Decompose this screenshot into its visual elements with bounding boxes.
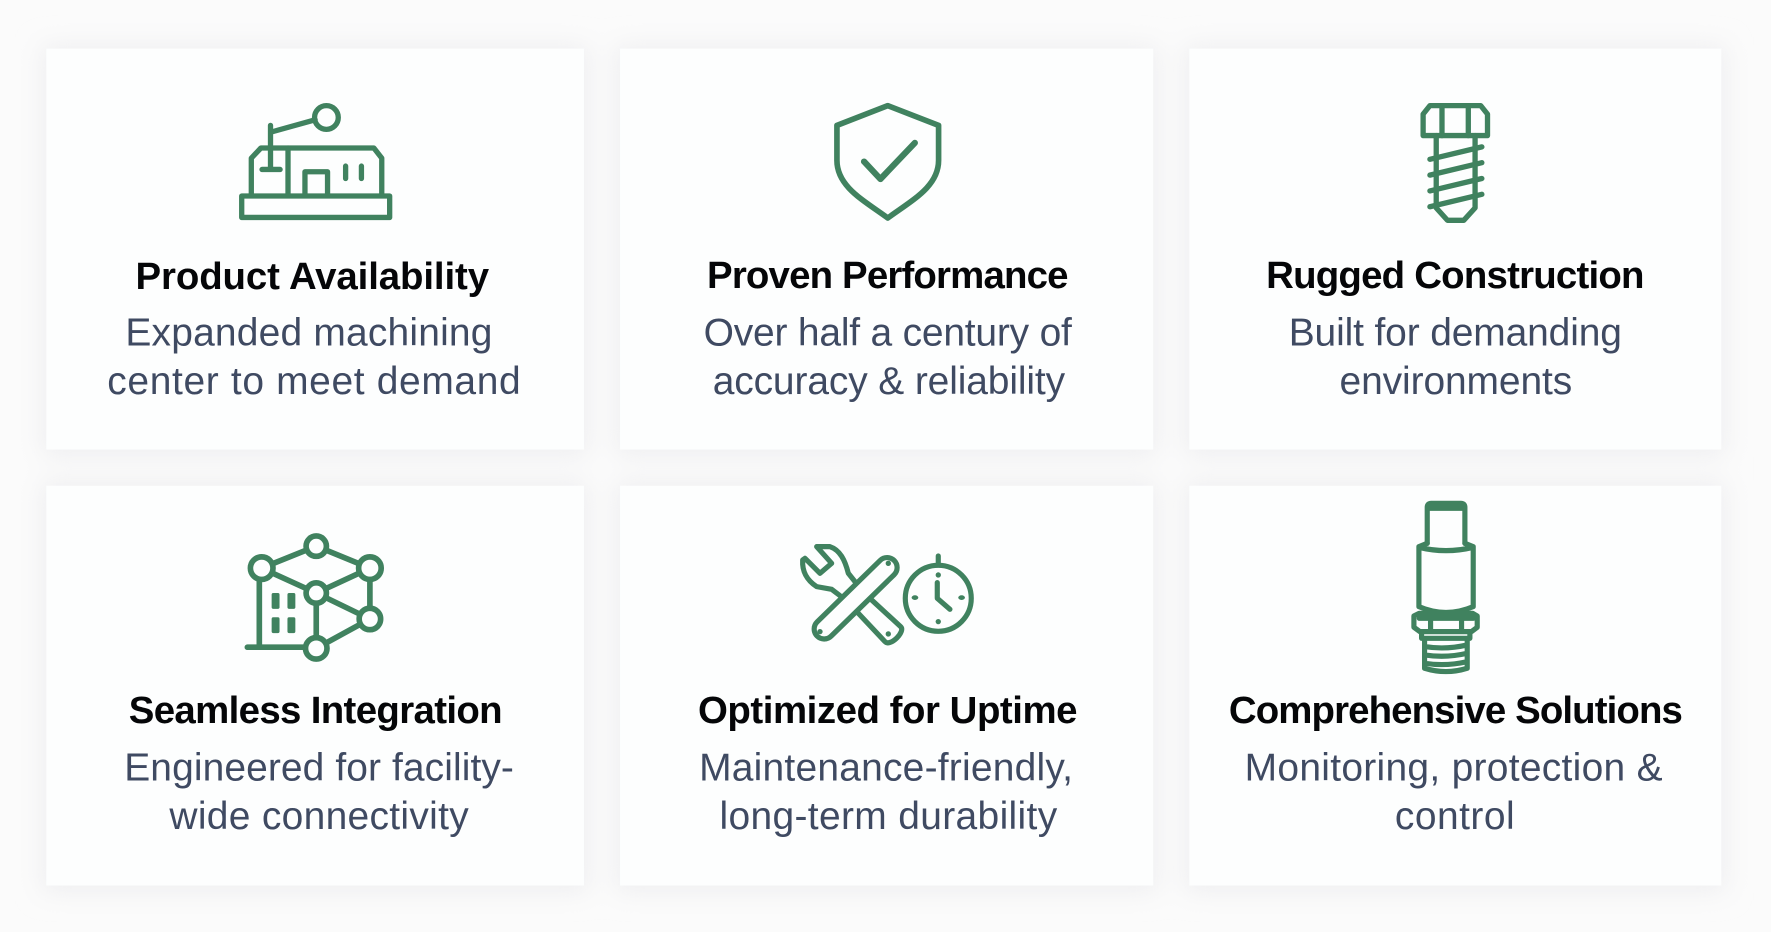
icon: threaded sensor [1414,503,1477,672]
heading: Comprehensive Solutions [1229,689,1683,732]
description: wide connectivity [168,795,469,838]
description: Expanded machining [125,312,492,355]
panel: Product Availability [46,49,584,450]
panel: Seamless Integration [46,486,584,886]
description: control [1395,795,1515,838]
description: Built for demanding [1289,312,1622,355]
description: Over half a century of [704,312,1072,355]
icon: crossed wrenches and clock [803,547,971,643]
description [1289,312,1622,403]
icon: building with connected network nodes [247,536,381,659]
heading: Proven Performance [707,254,1068,297]
description: Monitoring, protection & [1245,746,1663,789]
heading: Optimized for Uptime [698,689,1078,732]
description: long-term durability [719,795,1058,838]
description [1245,746,1663,838]
panel: Rugged Construction [1189,49,1721,450]
description: Engineered for facility- [124,746,514,789]
description [107,312,521,403]
icon: threaded bolt [1423,106,1488,220]
description [704,312,1072,403]
panel: Comprehensive Solutions [1189,486,1721,886]
panel: Optimized for Uptime [620,486,1153,886]
heading: Rugged Construction [1266,254,1645,297]
heading: Seamless Integration [129,689,503,732]
description: Maintenance-friendly, [699,746,1073,789]
description [699,746,1073,838]
icon: machining center building [242,106,390,217]
description [124,746,514,838]
description: accuracy & reliability [713,360,1066,403]
panel: Proven Performance [620,49,1153,450]
heading: Product Availability [136,255,490,298]
description: center to meet demand [107,360,521,403]
description: environments [1340,360,1572,403]
icon: shield with check mark [837,106,939,218]
